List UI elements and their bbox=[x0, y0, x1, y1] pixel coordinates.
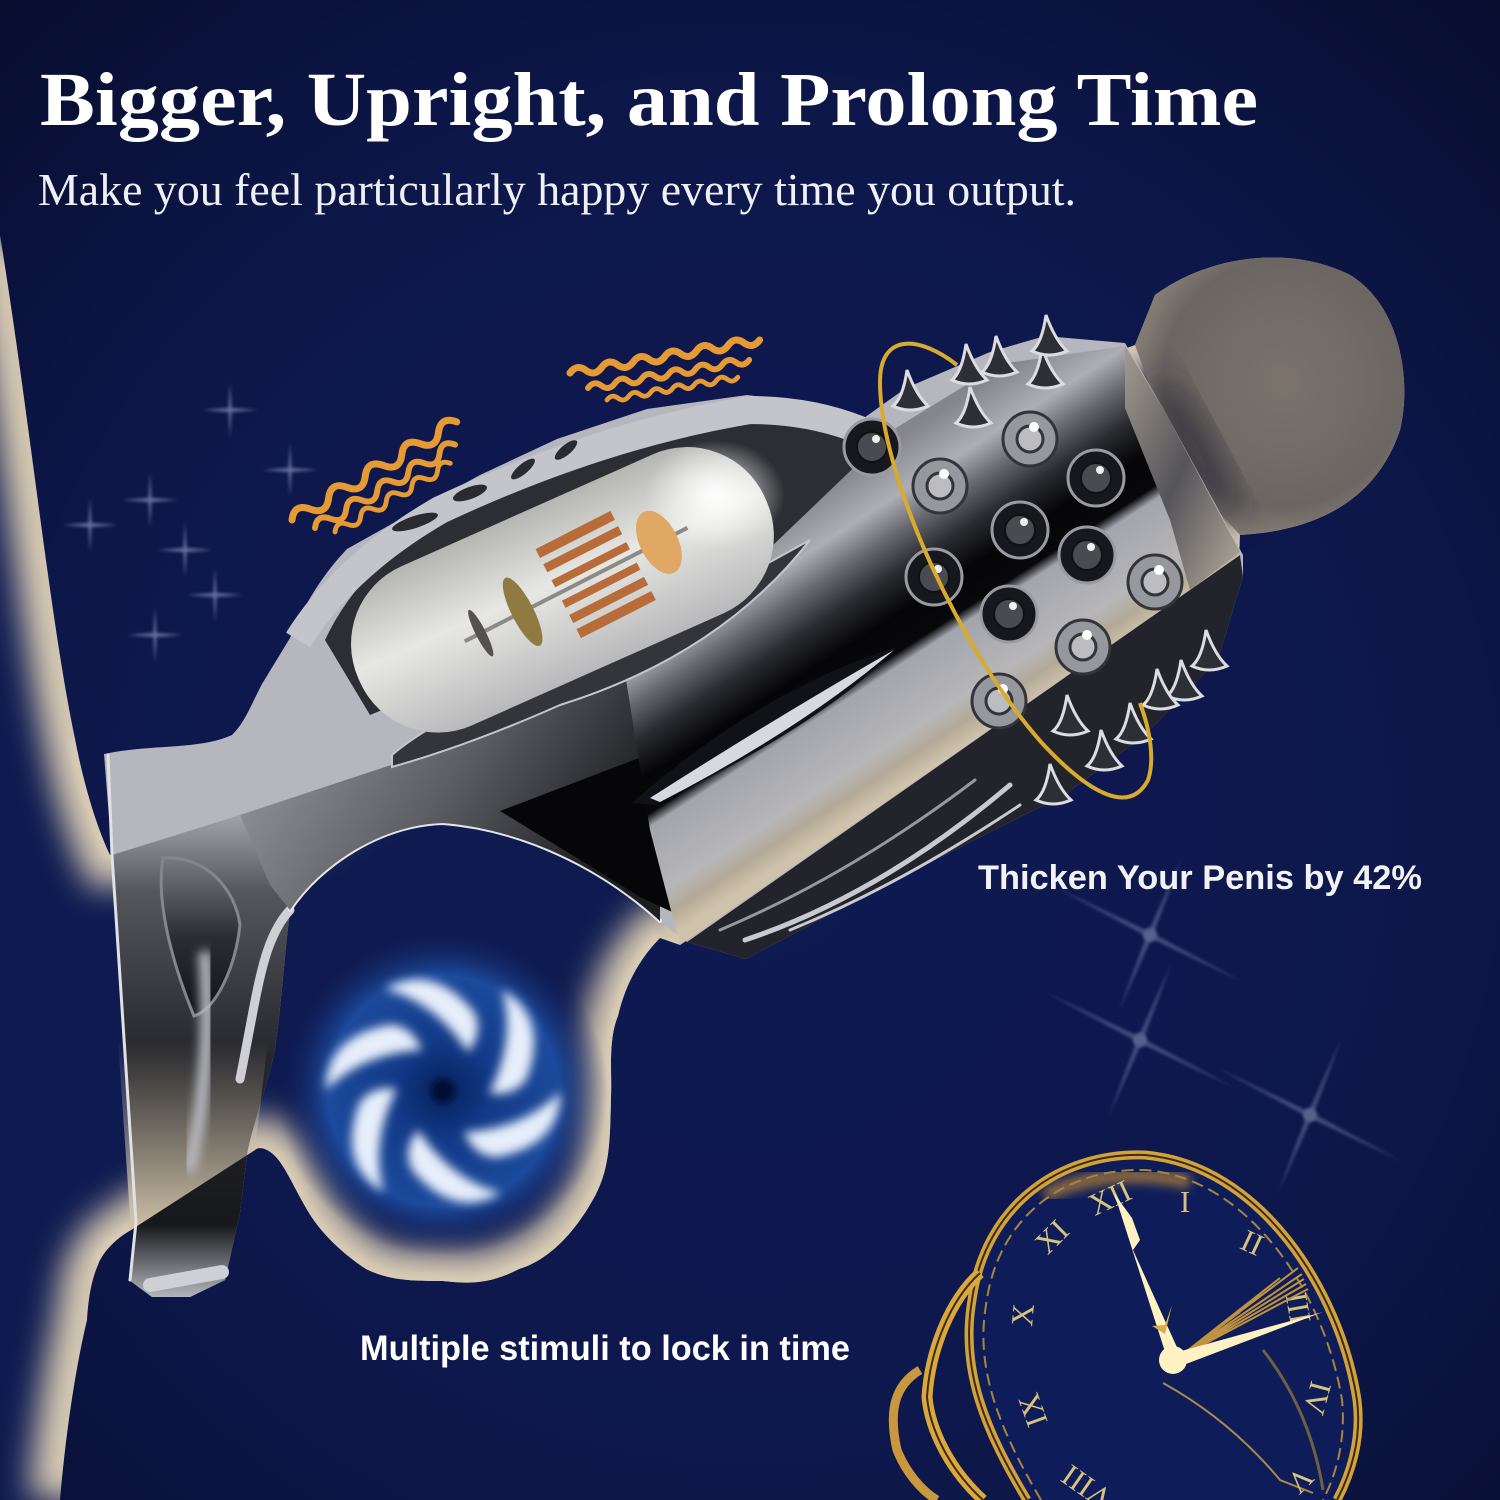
sleeve rim bbox=[1125, 346, 1240, 590]
vibration waves bbox=[292, 340, 760, 532]
dark streak band bbox=[392, 540, 810, 767]
strap opening bbox=[161, 858, 240, 1016]
swirl sphere bbox=[278, 926, 608, 1256]
gold ring bbox=[880, 344, 1151, 797]
lower bands bbox=[687, 555, 1243, 959]
clock numerals: XI bbox=[1028, 1213, 1076, 1261]
lower shaded panel bbox=[240, 665, 660, 921]
clock hands bbox=[1113, 1192, 1323, 1374]
background stars bbox=[62, 382, 1405, 1193]
clock numerals: XII bbox=[1083, 1173, 1137, 1223]
clock numerals: I bbox=[1180, 1184, 1190, 1219]
spikes bbox=[893, 315, 1227, 804]
dark patch bbox=[500, 750, 700, 925]
ridge dimples bbox=[390, 437, 580, 535]
clock dial bbox=[969, 1155, 1358, 1500]
clear sleeve body bbox=[104, 336, 1243, 1297]
clock numerals: III bbox=[1279, 1290, 1318, 1326]
hand star bbox=[1152, 1305, 1172, 1334]
clock numerals: II bbox=[1235, 1222, 1269, 1263]
lens streak bbox=[650, 650, 894, 802]
clock numerals: IV bbox=[1296, 1378, 1339, 1419]
beaded ridge bbox=[298, 410, 860, 640]
surface bumps bbox=[844, 412, 1182, 728]
band streaks bbox=[720, 780, 1020, 940]
motor bbox=[442, 483, 710, 686]
subtitle: Make you feel particularly happy every time you output. bbox=[38, 164, 1076, 215]
device bbox=[104, 315, 1243, 1297]
strap skin overlay bbox=[118, 1040, 268, 1230]
clock numerals: IX bbox=[1010, 1389, 1055, 1432]
callout: stimuli: Multiple stimuli to lock in time bbox=[360, 1329, 850, 1368]
clock glow bbox=[1045, 1176, 1190, 1195]
tip bbox=[1135, 258, 1404, 535]
clock bbox=[893, 1155, 1358, 1500]
clock numerals bbox=[1004, 1173, 1339, 1500]
clock numerals: X bbox=[1004, 1302, 1041, 1328]
motor capsule bbox=[324, 420, 801, 760]
clock sweep marks bbox=[1178, 1268, 1308, 1358]
motor bay shadow bbox=[325, 415, 870, 715]
clock rim bbox=[893, 1155, 1358, 1500]
motor glow bbox=[645, 440, 785, 550]
sleeve bbox=[620, 346, 1240, 945]
strap bbox=[112, 815, 290, 1297]
tip shadow bbox=[1136, 365, 1254, 535]
lens highlight bbox=[632, 647, 897, 805]
strap highlights bbox=[108, 755, 660, 1285]
clock numerals: V bbox=[1280, 1460, 1321, 1500]
callout: thicken: Thicken Your Penis by 42% bbox=[978, 859, 1422, 897]
title: Bigger, Upright, and Prolong Time bbox=[40, 58, 1258, 142]
body silhouette bbox=[0, 236, 1404, 1500]
